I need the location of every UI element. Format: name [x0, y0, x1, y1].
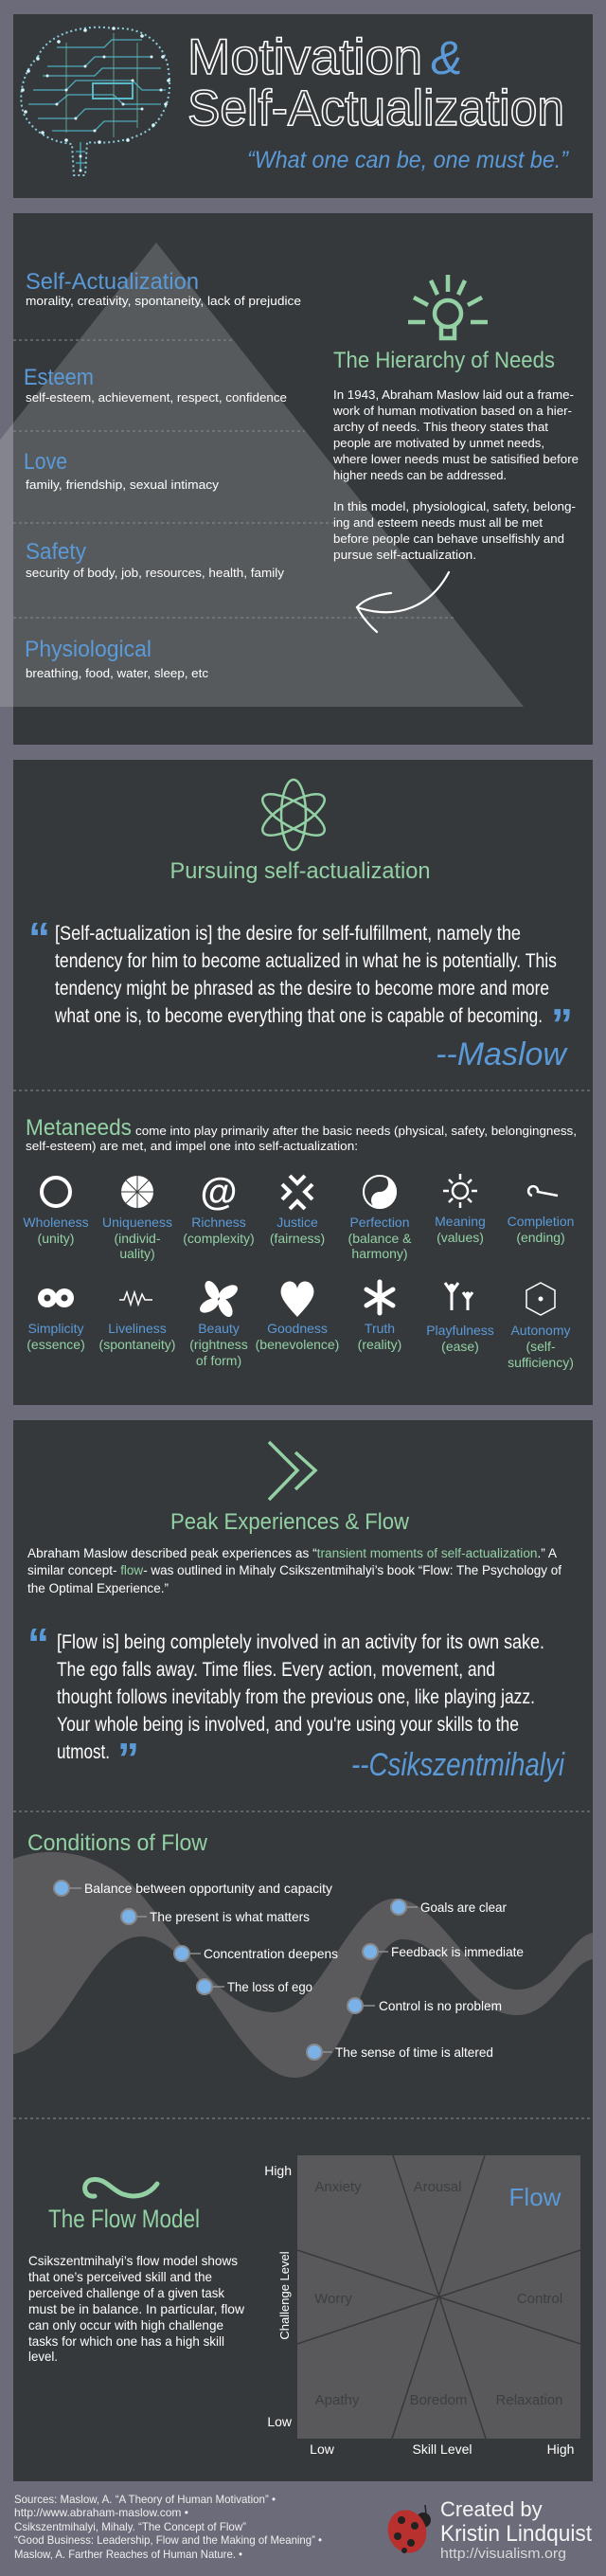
metaneed: richness: @	[200, 1171, 238, 1213]
metaneed: goodness: (benevolence)	[256, 1337, 339, 1352]
level: love: family, friendship, sexual intimacy	[26, 477, 220, 492]
quote: maslow: “	[28, 913, 50, 963]
metaneed: playfulness: Playfulness	[426, 1323, 494, 1338]
level: physiological	[25, 637, 209, 680]
text block: hierarchy description: In 1943, Abraham Maslow laid out a frame-	[333, 387, 574, 402]
quote: csikszentmihalyi: utmost.	[57, 1741, 110, 1763]
text block: peak experiences description: similar concept- flow- was outlined in Mihaly Csikszentmihalyi’s book “Flow: The Psychology of	[27, 1563, 561, 1577]
metaneed: richness	[183, 1171, 255, 1246]
subtitle quote: “What one can be, one must be.”	[247, 147, 570, 173]
credits: Created by	[440, 2497, 543, 2521]
text block: flow model description: that one’s perceived skill and the	[28, 2269, 212, 2284]
icon grid: metaneeds	[23, 1171, 574, 1370]
metaneed: wholeness	[23, 1178, 89, 1246]
heading: conditions of flow: Conditions of Flow	[27, 1830, 208, 1856]
text block: flow model description	[28, 2253, 245, 2364]
metaneed: uniqueness: (individ-	[114, 1231, 161, 1246]
axis labels: Challenge Level	[277, 2251, 292, 2340]
title: &	[431, 31, 462, 84]
title	[187, 29, 564, 136]
text block: hierarchy description: pursue self-actualization.	[333, 548, 476, 562]
text block: flow model description: level.	[28, 2349, 58, 2364]
metaneed: meaning: Meaning	[435, 1214, 486, 1229]
metaneed: liveliness: (spontaneity)	[99, 1337, 175, 1352]
metaneed: uniqueness	[102, 1176, 172, 1261]
text block: flow model description: perceived challenge of a given task	[28, 2285, 225, 2300]
text block: metaneeds intro: come into play primarily after the basic needs (physical, safety, belongingness,	[135, 1124, 577, 1138]
metaneed: perfection: harmony)	[351, 1246, 408, 1261]
metaneed: completion: (ending)	[516, 1230, 565, 1245]
footer: sources: Sources: Maslow, A. “A Theory of Human Motivation” •	[14, 2493, 276, 2506]
text block: hierarchy description: archy of needs. This theory states that	[333, 420, 548, 434]
icon: double chevron	[269, 1442, 315, 1500]
icon: circuit brain	[21, 27, 169, 175]
heading: the hierarchy of needs: The Hierarchy of Needs	[333, 348, 555, 373]
chart: flow model grid: Flow	[509, 2183, 561, 2211]
quote: maslow: --Maslow	[436, 1036, 568, 1072]
text block: metaneeds intro	[26, 1115, 577, 1153]
text block: hierarchy description: before people can behave unselfishly and	[333, 531, 564, 546]
title: Motivation	[187, 29, 422, 85]
metaneed: completion	[508, 1186, 574, 1245]
level: love: Love	[24, 449, 67, 475]
chart: conditions of flow wave: The sense of time is altered	[335, 2045, 493, 2060]
text block: peak experiences description	[27, 1546, 561, 1595]
text block: peak experiences description: Abraham Maslow described peak experiences as “transient moments of self-actualization.” A	[27, 1546, 557, 1560]
footer: sources	[14, 2493, 322, 2561]
axis labels	[264, 2163, 574, 2457]
metaneed: liveliness: Liveliness	[108, 1321, 167, 1336]
footer: sources: Csikszentmihalyi, Mihaly. “The Concept of Flow”	[14, 2520, 246, 2533]
level: esteem: Esteem	[24, 365, 94, 390]
text block: hierarchy description: work of human motivation based on a hier-	[332, 404, 572, 418]
metaneed: truth: (reality)	[358, 1337, 401, 1352]
chart: conditions of flow wave: The present is what matters	[150, 1909, 310, 1924]
quote: csikszentmihalyi	[27, 1619, 565, 1783]
level: esteem: self-esteem, achievement, respect, confidence	[26, 390, 287, 405]
chart: conditions of flow wave: Concentration deepens	[204, 1946, 338, 1961]
level: esteem	[24, 365, 287, 405]
metaneed: perfection: Perfection	[349, 1215, 410, 1230]
text block: metaneeds intro: Metaneeds	[26, 1115, 132, 1141]
quote: csikszentmihalyi: ”	[117, 1734, 139, 1783]
metaneed: liveliness	[99, 1292, 175, 1352]
metaneed: justice: (fairness)	[270, 1231, 325, 1246]
metaneed: autonomy: (self-	[526, 1339, 556, 1354]
chart: flow model grid: Control	[517, 2291, 562, 2307]
credits: Kristin Lindquist	[440, 2521, 592, 2547]
level: safety: Safety	[26, 539, 86, 565]
metaneed: perfection: (balance &	[348, 1231, 412, 1246]
chart: flow model grid: Anxiety	[314, 2179, 362, 2195]
footer: sources: “Good Business: Leadership, Flow and the Making of Meaning” •	[14, 2533, 322, 2547]
quote: maslow: ”	[551, 1000, 573, 1049]
level: physiological: Physiological	[25, 637, 152, 662]
panel: peak experiences and flow	[13, 1420, 593, 2481]
level: self-actualization: morality, creativity, spontaneity, lack of prejudice	[26, 294, 301, 308]
metaneed: goodness	[256, 1281, 339, 1352]
text block: hierarchy description	[332, 387, 579, 562]
metaneed: perfection	[348, 1175, 412, 1261]
quote: maslow: [Self-actualization is] the desire for self-fulfillment, namely the	[55, 923, 521, 945]
axis labels: Low	[267, 2414, 293, 2429]
text block: peak experiences description: the Optimal Experience.”	[27, 1581, 169, 1595]
level: self-actualization: Self-Actualization	[26, 269, 199, 295]
icon: lightbulb	[408, 275, 488, 338]
chart: conditions of flow wave: Feedback is immediate	[391, 1944, 524, 1959]
credits: http://visualism.org	[440, 2546, 566, 2562]
text block: hierarchy description: people are motivated by unmet needs,	[333, 436, 544, 450]
metaneed: playfulness: (ease)	[441, 1339, 479, 1354]
chart: flow model grid: Boredom	[410, 2392, 467, 2408]
axis labels: High	[547, 2441, 574, 2457]
metaneed: beauty: Beauty	[198, 1321, 240, 1336]
metaneed: playfulness	[426, 1283, 494, 1354]
metaneed: completion: Completion	[508, 1214, 574, 1229]
chart: conditions of flow wave: Goals are clear	[420, 1900, 507, 1915]
metaneed: simplicity	[27, 1288, 85, 1352]
icon: ladybug	[382, 2505, 433, 2558]
chart: flow model grid: Worry	[314, 2291, 352, 2307]
quote: csikszentmihalyi: Your whole being is involved, and you're using your skills to the	[57, 1714, 519, 1736]
level: self-actualization	[26, 269, 301, 308]
metaneed: autonomy: sufficiency)	[508, 1355, 574, 1370]
chart: flow model grid: Arousal	[414, 2179, 461, 2195]
axis labels: Skill Level	[412, 2441, 472, 2457]
text block: flow model description: Csikszentmihalyi’s flow model shows	[28, 2253, 238, 2268]
footer: sources: http://www.abraham-maslow.com •	[14, 2506, 188, 2519]
metaneed: wholeness: (unity)	[38, 1231, 74, 1246]
metaneed: beauty: (rightness	[189, 1337, 248, 1352]
chart: conditions of flow wave: Balance between opportunity and capacity	[84, 1881, 332, 1896]
text block: flow model description: must be in balance. In particular, flow	[28, 2301, 245, 2316]
metaneed: uniqueness: Uniqueness	[102, 1215, 172, 1230]
chart: flow model grid: Relaxation	[496, 2392, 562, 2408]
metaneed: truth: Truth	[365, 1321, 395, 1336]
metaneed: richness: Richness	[191, 1215, 246, 1230]
quote: maslow	[28, 913, 573, 1072]
metaneed: wholeness: Wholeness	[23, 1215, 89, 1230]
panel: header	[13, 14, 593, 198]
text block: hierarchy description: where lower needs must be satisified before	[332, 452, 579, 466]
metaneed: richness: (complexity)	[183, 1231, 255, 1246]
metaneed: simplicity: (essence)	[27, 1337, 85, 1352]
chart: conditions of flow wave: Control is no problem	[379, 1998, 502, 2013]
chart: conditions of flow wave	[13, 1830, 593, 2078]
text block: hierarchy description: higher needs can be addressed.	[333, 468, 507, 482]
level: safety	[26, 539, 285, 580]
metaneed: autonomy: Autonomy	[510, 1323, 571, 1338]
text block: hierarchy description: In this model, physiological, safety, belong-	[333, 499, 576, 513]
metaneed: meaning	[435, 1174, 486, 1245]
level: safety: security of body, job, resources, health, family	[26, 566, 285, 580]
heading: the flow model: The Flow Model	[48, 2205, 200, 2233]
title: Self-Actualization	[187, 81, 564, 136]
arrow: curved pointer	[357, 572, 449, 632]
text block: flow model description: tasks for which one has a high skill	[28, 2333, 224, 2349]
heading: peak experiences & flow: Peak Experiences & Flow	[170, 1509, 410, 1535]
icon: atom	[257, 780, 330, 850]
metaneed: justice	[270, 1176, 325, 1246]
quote: csikszentmihalyi: The ego falls away. Time flies. Every action, movement, and	[57, 1659, 495, 1681]
metaneed: truth	[358, 1282, 401, 1352]
metaneed: justice: Justice	[276, 1215, 318, 1230]
metaneed: simplicity: Simplicity	[27, 1321, 84, 1336]
panel: pursuing self-actualization	[13, 760, 593, 1405]
text block: hierarchy description: ing and esteem needs must all be met	[333, 515, 543, 530]
heading: pursuing self-actualization: Pursuing self-actualization	[170, 858, 430, 884]
panel: hierarchy of needs	[0, 213, 593, 745]
axis labels: High	[264, 2163, 292, 2178]
metaneed: autonomy	[508, 1283, 574, 1370]
chart: flow model grid: Apathy	[315, 2392, 360, 2408]
icon: tilde wave	[85, 2179, 157, 2196]
chart: flow model grid	[264, 2155, 580, 2457]
text block: flow model description: can only occur with high challenge	[28, 2317, 223, 2333]
metaneed: beauty: of form)	[196, 1353, 241, 1368]
level: love	[24, 449, 220, 492]
quote: csikszentmihalyi: --Csikszentmihalyi	[351, 1747, 565, 1783]
chart: conditions of flow wave: The loss of ego	[227, 1979, 312, 1994]
credits	[440, 2497, 592, 2562]
axis labels: Low	[310, 2441, 335, 2457]
metaneed: goodness: Goodness	[267, 1321, 328, 1336]
metaneed: beauty	[189, 1278, 248, 1368]
footer: sources: Maslow, A. Farther Reaches of Human Nature. •	[14, 2548, 242, 2561]
quote: csikszentmihalyi: “	[27, 1619, 49, 1668]
metaneed: meaning: (values)	[437, 1230, 484, 1245]
text block: metaneeds intro: self-esteem) are met, and impel one into self-actualization:	[26, 1139, 358, 1153]
level: physiological: breathing, food, water, sleep, etc	[26, 666, 209, 680]
pyramid	[0, 243, 524, 707]
metaneed: uniqueness: uality)	[119, 1246, 155, 1261]
